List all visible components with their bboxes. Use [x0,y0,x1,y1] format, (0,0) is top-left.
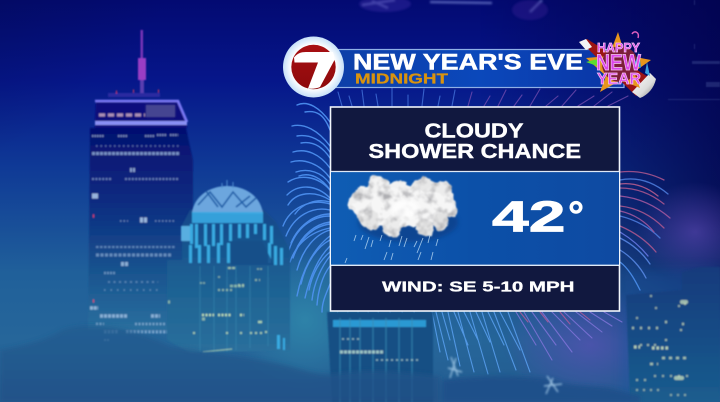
rain streaks [345,235,438,263]
pale green windows [168,268,268,352]
greeting text: HAPPY [597,40,640,55]
panel: condition heading: SHOWER CHANCE [368,141,581,163]
cloud highlight [391,200,419,218]
icon: rain cloud [345,176,458,263]
station logo [283,36,344,98]
greeting text: NEW [596,50,641,75]
treeline silhouette [0,326,640,402]
right building [626,267,720,402]
panel: temperature band [331,172,619,265]
orange star [586,32,651,92]
dome tower [167,180,290,353]
temperature value [492,192,584,242]
spire [138,30,146,94]
upper rays [338,88,628,106]
lit window rows [90,135,180,340]
subtitle text: MIDNIGHT [355,72,448,88]
right pink and blue plumes [620,171,670,290]
cloud puffs [348,176,458,237]
star centre [602,46,638,82]
faint graphic lines top right [668,0,720,100]
temperature value: 42 [492,192,566,242]
temperature value: ° [568,194,584,238]
panel: condition heading [368,120,581,163]
banner bar [336,50,624,88]
centre building below panel [327,312,433,402]
building body [167,210,290,353]
numeral 7 [294,52,334,89]
dome [192,186,263,214]
noisemaker horn [579,39,656,98]
window lights [632,296,690,395]
panel: condition heading: CLOUDY [424,120,524,142]
vertical fins [200,266,268,352]
confetti [586,32,650,76]
dark crown overlap [231,241,274,265]
cyan light columns [181,212,285,350]
red aircraft lights [93,216,94,301]
forecast panel [330,107,620,311]
firework burst behind panel [283,88,670,374]
greeting text [596,40,641,88]
title text: NEW YEAR'S EVE [353,50,583,74]
lower rays [336,311,622,374]
Prudential tower [88,30,193,340]
faint fireworks at top edge [359,0,548,20]
banner [336,50,624,88]
greeting text: YEAR [597,71,641,88]
bright firework sparks [448,357,562,394]
happy new year badge [579,32,656,98]
wind line: WIND: SE 5-10 MPH [382,280,574,296]
tower shaft [88,128,193,330]
crown [95,91,187,128]
cloud shadow [358,202,458,242]
left curved blue plumes [283,104,330,312]
